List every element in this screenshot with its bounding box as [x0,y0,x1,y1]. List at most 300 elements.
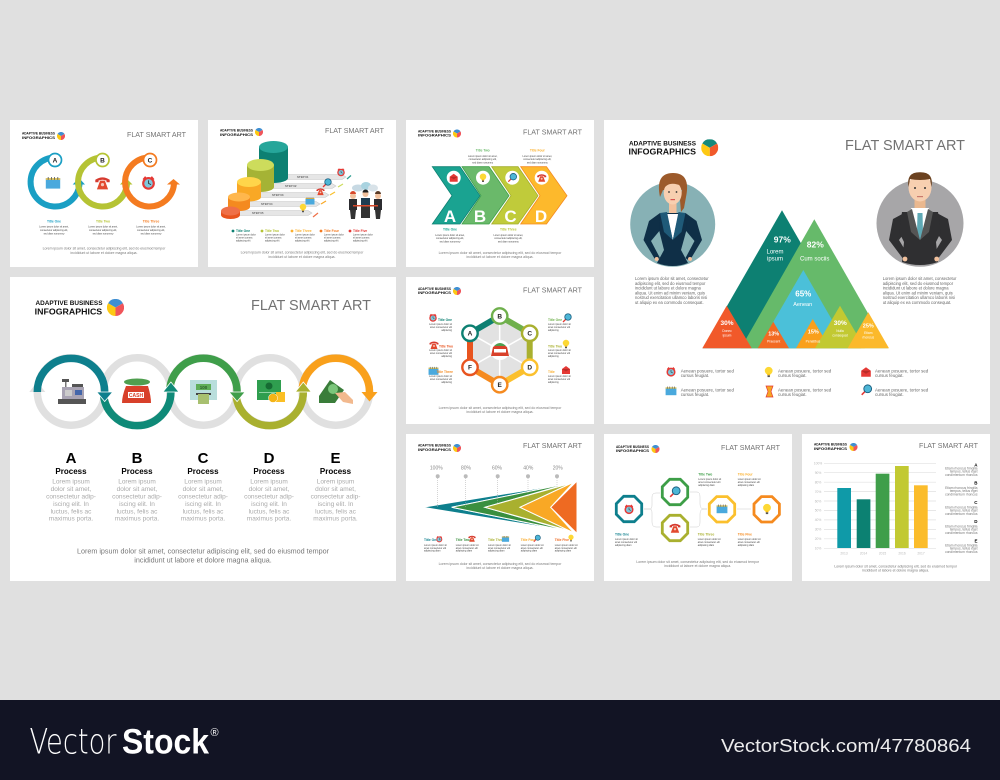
legend: cursus feugiat. [681,392,709,397]
legend: amet consectetur elit [456,547,478,550]
percent scale [430,465,563,471]
paragraph right: incididunt ut labore et dolore magna [883,286,949,291]
right labels: Title Two [548,344,562,348]
logo [418,287,461,295]
node letters: C [527,331,532,338]
text: title four: Title Four [530,148,545,152]
side labels: Etiam rhoncus fringilla [945,486,978,490]
chevron B [462,167,509,224]
text: title four: Lorem ipsum dolor sit amet, [523,155,552,158]
right labels: amet consectetur elit [548,326,570,329]
column B: dolor sit amet, [117,486,158,493]
side labels: Etiam rhoncus fringilla [945,466,978,470]
column B: B [132,450,143,467]
text: title two: sed diam nonummy [93,232,114,236]
text: title three: consectetur adipiscing elit, [494,237,523,240]
icon: cash register [58,379,86,404]
legend: Lorem ipsum dolor [236,234,256,236]
value 13%: 13% [768,332,779,338]
legend: Title One [424,538,438,542]
octagon labels: Lorem ipsum dolor sit [738,538,761,541]
legend: Lorem ipsum dolor [353,234,373,236]
gray arrowhead [29,382,45,392]
heading: FLAT SMART ART [523,443,583,450]
column A: A [66,450,77,467]
column D: luctus, felis ac [249,508,290,515]
legend: Lorem ipsum dolor sit [456,544,479,547]
side labels: tempus, tellus eget [950,547,978,551]
legend: sit amet consec [236,236,253,240]
logo: INFOGRAPHICS [35,307,103,316]
column C: consectetur adip- [178,494,228,500]
column D: maximus porta. [247,516,291,523]
logo [418,129,461,138]
column E [311,450,360,523]
hexagon edges [470,316,530,385]
axis labels: 60% [815,499,821,503]
scale pins [438,476,557,507]
logo: ADAPTIVE BUSINESS [418,287,452,291]
right labels: Lorem ipsum dolor sit [548,323,571,326]
octagon labels: amet consectetur elit [615,541,637,544]
loop arrow A [31,154,85,206]
footer text: incididunt ut labore et dolore magna aliqua. [134,555,272,564]
value 65%: 65% [795,290,811,299]
brand logo [30,722,219,762]
octagon labels: Lorem ipsum dolor sit [738,478,761,481]
legend: Title Three [295,229,312,233]
value 25% [862,324,875,339]
legend: Aenean posuere, tortor sed [778,388,832,392]
text: title one: consectetur adipiscing elit, [40,229,68,232]
logo: ADAPTIVE BUSINESS [629,141,696,148]
cylinder 4 [228,192,250,211]
column D: D [264,450,275,467]
left labels: amet consectetur elit [430,378,452,381]
legend: Title Four [324,229,340,233]
column E: Lorem ipsum [317,479,354,486]
logo [814,443,858,451]
axis labels: 20% [815,537,821,541]
left labels: adipiscing [441,329,453,332]
text: title one [39,220,69,236]
octagon labels: adipiscing diam [698,544,714,547]
chevron A [432,167,480,224]
legend: adipiscing elit [236,240,251,242]
column D [244,450,294,523]
value 65%: Aenean [793,302,812,308]
legend: Lorem ipsum dolor [295,234,315,236]
arc E [302,358,378,402]
icon: phone [95,177,110,189]
chevron letters [444,207,547,226]
column D: Process [253,467,285,476]
paragraph left: nostrud exercitation ullamco laboris nisi [635,295,707,300]
icon: banknotes [257,380,285,402]
arc A [37,358,113,402]
text: title four [523,148,552,164]
logo: ADAPTIVE BUSINESS [22,132,56,136]
node letters: A [468,331,473,338]
icon: cash bag: CASH [129,393,143,399]
icon: calendar [46,177,60,189]
cylinder 1 [259,141,288,183]
legend: amet consectetur elit [424,547,446,550]
octagon yellow [709,497,735,522]
left labels: adipiscing [441,381,453,384]
column E: Process [320,467,352,476]
logo [35,299,124,316]
legend: Title Five [353,229,367,233]
column B: iscing elit. In [119,501,155,508]
triangle chart [702,210,889,348]
octagon olive [662,515,688,541]
paragraph left: adipiscing elit, sed do eiusmod tempor [635,281,706,286]
panel: cylinders and steps [208,120,396,267]
legend: cursus feugiat. [778,373,807,378]
logo: ADAPTIVE BUSINESS [616,445,650,449]
footer text: incididunt ut labore et dolore magna aliqua. [71,251,137,255]
text: title one: Title One [443,228,457,232]
column A: consectetur adip- [46,494,96,500]
column C: dolor sit amet, [183,486,224,493]
column E: E [330,450,341,467]
paragraph right: nostrud exercitation ullamco laboris nisi [883,295,955,300]
side labels: condimentum rhoncus [945,531,978,535]
legend: Lorem ipsum dolor sit [424,544,447,547]
value 15%: 15% [808,329,819,335]
chevron letters: C [504,207,517,226]
octagon labels: amet consectetur elit [698,541,720,544]
year labels [840,552,925,556]
step labels: STEP 04 [261,202,273,206]
footer text: incididunt ut labore et dolore magna aliqua. [862,569,929,573]
legend: adipiscing elit [324,240,339,242]
legend: Title Four [521,538,536,542]
footer text: incididunt ut labore et dolore magna aliqua. [467,566,533,570]
icon: hand with money [319,380,353,404]
value 65% [793,290,812,308]
heading: FLAT SMART ART [127,132,187,139]
legend: Aenean posuere, tortor sed [778,368,832,374]
text: title three: sed diam nonummy [498,240,520,243]
right labels: Title [548,370,555,374]
left labels: Title One [438,318,452,322]
right labels: amet consectetur elit [548,352,570,355]
legend: cursus feugiat. [875,392,904,397]
legend: cursus feugiat. [875,373,904,378]
year labels: 2014 [860,552,867,556]
column A [46,450,96,523]
column A: luctus, felis ac [51,508,92,515]
heading: FLAT SMART ART [523,288,583,294]
left labels: Lorem ipsum dolor sit [429,349,452,352]
column D: iscing elit. In [251,501,287,508]
step labels: STEP 05 [252,211,264,215]
paragraph left: Lorem ipsum dolor sit amet, consectetur [635,276,709,281]
text: title three: Title Three [500,228,517,232]
brand logo: Vector [30,722,117,762]
value 30% lime: 30% [834,320,847,327]
logo: INFOGRAPHICS [418,290,451,295]
hexagon centre [470,316,530,385]
legend: Title Three [488,538,505,542]
value 25%: 25% [863,324,874,330]
panel: bar chart [802,434,990,581]
year labels: 2013 [840,552,848,556]
column A: iscing elit. In [53,501,89,508]
legend: adipiscing elit [353,240,368,242]
column C: iscing elit. In [185,501,221,508]
text: title one: Title One [47,220,61,224]
step labels [252,175,309,215]
column C [178,450,228,523]
column B: Lorem ipsum [118,479,156,486]
layered arrow shape [423,481,577,534]
text: title four: sed diam nonummy [527,161,549,164]
side labels: tempus, tellus eget [950,489,978,493]
text: title two: Lorem ipsum dolor sit amet, [468,155,498,158]
chevron letters: B [474,207,486,226]
left labels: amet consectetur elit [430,352,452,355]
legend: cursus feugiat. [778,392,807,397]
node letters: E [498,382,503,389]
octagon teal [616,496,642,522]
icon: meeting people [349,182,382,219]
octagon green [662,479,688,505]
column E: consectetur adip- [311,494,360,500]
legend: adipiscing diam [555,550,571,553]
logo: INFOGRAPHICS [220,132,253,137]
column B: maximus porta. [115,516,159,523]
text: title one: Lorem ipsum dolor sit amet, [39,226,69,228]
text: title three: consectetur adipiscing elit, [137,229,165,232]
bar chart [837,466,928,548]
value 13% [767,332,780,344]
side labels: tempus, tellus eget [950,470,978,474]
panel: three loop arrows [10,120,198,267]
octagon labels: amet consectetur elit [738,541,760,544]
loop arrow B [78,154,132,206]
step bars [235,174,346,216]
footer text: incididunt ut labore et dolore magna aliqua. [664,564,731,568]
octagon labels: adipiscing diam [615,544,631,547]
percent scale: 60% [492,465,503,471]
side labels: tempus, tellus eget [950,528,978,532]
value 13%: Praesent [767,340,780,344]
side labels: Etiam rhoncus fringilla [945,524,978,528]
value 30% lime [832,320,848,337]
legend [424,535,578,553]
column C: Process [187,467,219,476]
side labels: condimentum rhoncus [945,550,978,554]
value 30% red: Donec [722,329,732,333]
small arrows [313,176,351,217]
step labels: STEP 01 [297,175,309,179]
axis labels: 70% [815,490,821,494]
octagon labels: Title Five [738,532,752,536]
chevron D [521,167,567,224]
grid lines [824,463,936,548]
octagon labels: Title One [615,532,629,536]
legend: Lorem ipsum dolor [324,234,344,236]
axis labels: 90% [815,471,821,475]
legend: adipiscing diam [424,550,440,553]
axis labels: 30% [815,528,821,532]
column C: luctus, felis ac [183,508,224,515]
icon: atm: 100 [200,385,208,390]
text: title one: sed diam nonummy [44,232,65,236]
loop arrow C: C [148,157,153,164]
text: title two: consectetur adipiscing elit, [469,158,497,161]
legend: amet consectetur elit [521,547,543,550]
side labels [945,462,978,554]
value 97%: ipsum [767,257,783,263]
left labels: Title Three [436,370,453,374]
column C: maximus porta. [181,516,225,523]
right labels: amet consectetur elit [548,378,570,381]
text: title four: consectetur adipiscing elit, [523,158,552,161]
text: title one: consectetur adipiscing elit, [436,237,464,240]
footer text: Lorem ipsum dolor sit amet, consectetur adipiscing elit, sed do eiusmod tempor [241,250,364,254]
arc D [236,382,311,426]
heading: FLAT SMART ART [919,443,979,450]
column C: Lorem ipsum [184,479,222,486]
loop arrow C [125,154,180,206]
connectors [644,492,751,527]
paragraph right: adipiscing elit, sed do eiusmod tempor [883,281,954,286]
paragraph right: Lorem ipsum dolor sit amet, consectetur [883,276,957,281]
year labels: 2016 [898,552,906,556]
legend: Aenean posuere, tortor sed [681,388,734,392]
year labels: 2017 [917,552,925,556]
column A: maximus porta. [49,516,93,523]
legend: amet consectetur elit [488,547,510,550]
right labels: Lorem ipsum dolor sit [548,349,571,352]
text: title three [494,228,523,243]
side labels: C [974,500,978,505]
left labels [429,314,453,384]
value 15% [806,329,821,344]
legend: Title Five [555,538,569,542]
value 82%: Cum sociis [800,257,829,263]
legend: Title One [236,229,250,233]
footer text: Lorem ipsum dolor sit amet, consectetur adipiscing elit, sed do eiusmod tempor [43,246,166,250]
side labels: Etiam rhoncus fringilla [945,506,978,510]
legend: Lorem ipsum dolor sit [555,544,578,547]
side labels: tempus, tellus eget [950,509,978,513]
legend: Lorem ipsum dolor sit [488,544,511,547]
footer text: incididunt ut labore et dolore magna aliqua. [467,410,533,414]
value 30% red: 30% [720,320,734,327]
arc B [104,382,179,426]
text: title one: Lorem ipsum dolor sit amet, [435,234,465,237]
value 82% [800,240,829,263]
scale dots [436,474,559,478]
text: title two [468,148,498,164]
value 97%: Lorem [766,250,784,256]
logo: INFOGRAPHICS [616,448,649,453]
gray rings [37,358,369,425]
text: title two: sed diam nonummy [472,161,494,164]
footer text: Lorem ipsum dolor sit amet, consectetur adipiscing elit, sed do eiusmod tempor [439,562,562,566]
legend [666,367,929,397]
logo [628,139,718,156]
axis labels: 80% [815,480,821,484]
octagon labels: amet consectetur elit [698,481,721,484]
logo: ADAPTIVE BUSINESS [418,444,452,448]
right labels [548,314,571,384]
step labels: STEP 02 [285,184,297,188]
icon: clock [142,176,155,190]
paragraph right: ut aliquip ex ea commodo consequat. [883,300,951,305]
legend: Title Two [265,229,279,233]
text: title two: Lorem ipsum dolor sit amet, [88,226,118,228]
footer text: Lorem ipsum dolor sit amet, consectetur adipiscing elit, sed do eiusmod tempor [834,564,958,568]
side labels: condimentum rhoncus [945,492,978,496]
axis labels: 50% [815,509,821,513]
octagon labels: Title Three [698,532,714,536]
right labels: adipiscing [548,355,559,358]
arc C [170,358,245,402]
text: title three: Lorem ipsum dolor sit amet, [136,226,166,228]
legend: adipiscing diam [456,550,472,553]
text: title two: Title Two [96,220,110,224]
logo: INFOGRAPHICS [814,446,847,451]
logo: INFOGRAPHICS [628,147,697,156]
legend: Aenean posuere, tortor sed [875,388,929,392]
text: title three: Lorem ipsum dolor sit amet, [494,234,523,237]
portrait: man [876,172,964,267]
heading: FLAT SMART ART [721,445,781,452]
brand logo: ® [210,727,219,739]
value 25%: rhoncus [862,335,875,339]
side labels: A [974,462,978,467]
chevron icons [447,171,549,185]
percent scale: 40% [523,465,534,471]
brand logo: Stock [122,722,209,762]
footer text: Lorem ipsum dolor sit amet, consectetur adipiscing elit, sed do eiusmod tempor [77,547,330,556]
column D: dolor sit amet, [249,486,290,493]
logo: ADAPTIVE BUSINESS [220,128,254,132]
right labels: adipiscing [548,329,559,332]
side labels: D [974,519,978,524]
octagon labels: Lorem ipsum dolor sit [698,478,721,481]
legend: sit amet consec [295,236,312,240]
column A: Lorem ipsum [52,479,90,486]
left labels: Lorem ipsum dolor sit [429,323,452,326]
logo: ADAPTIVE BUSINESS [418,130,452,134]
node letters: D [527,365,532,372]
logo: ADAPTIVE BUSINESS [36,300,103,307]
text: title three: sed diam nonummy [141,232,162,236]
value 25%: Etiam [864,331,873,335]
octagon orange [754,497,779,522]
octagon labels: Lorem ipsum dolor sit [698,538,721,541]
footer text: incididunt ut labore et dolore magna aliqua. [467,255,533,259]
panel: hexagon [406,277,594,424]
node letters: B [497,313,502,320]
legend: Title Two [456,538,470,542]
node letters [468,313,532,389]
step icons [300,168,345,212]
logo [418,444,461,452]
logo: INFOGRAPHICS [418,133,451,138]
cylinder 5 [221,206,240,219]
footer text: Lorem ipsum dolor sit amet, consectetur adipiscing elit, sed do eiusmod tempor [439,251,562,255]
loop arrow A: A [53,157,58,164]
legend [232,229,373,242]
